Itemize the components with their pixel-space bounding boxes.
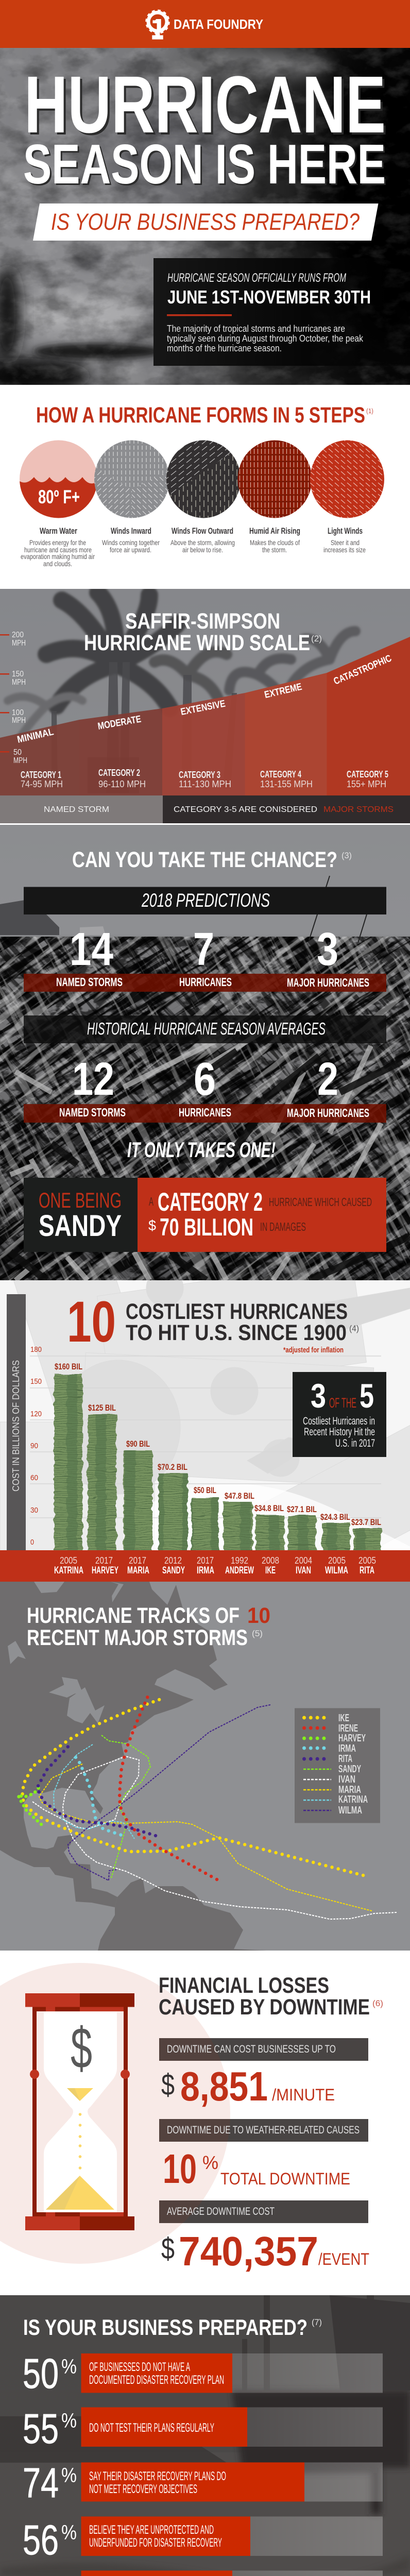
severity labels: CATASTROPHIC xyxy=(332,653,394,687)
stat: cost per minute xyxy=(161,2043,336,2109)
map water: Hudson Bay and lakes xyxy=(8,1582,178,1723)
historical numbers xyxy=(72,1054,338,1105)
track: Wilma xyxy=(68,1705,270,1880)
stat row: 50% no plan: 50 xyxy=(23,2350,59,2397)
speed axis xyxy=(0,631,27,765)
map land: South America xyxy=(98,1878,267,1951)
years and names strip: HARVEY xyxy=(92,1565,118,1576)
historical numbers: 12 xyxy=(72,1054,114,1105)
step: winds flow outward xyxy=(170,526,235,554)
years and names strip: ANDREW xyxy=(225,1565,254,1576)
stat row: 50% periodic backups xyxy=(23,2569,383,2576)
major storms bar: MAJOR STORMS xyxy=(323,805,394,814)
track: Irma xyxy=(76,1757,122,1835)
circle: winds inward xyxy=(94,440,169,518)
category 2: 96-110 MPH xyxy=(98,779,146,789)
step: light winds: Steer it and xyxy=(331,538,360,547)
speed axis: 100 xyxy=(12,708,24,717)
stat: weather-related downtime xyxy=(163,2124,360,2192)
heading: (2) xyxy=(311,634,322,643)
category 3: 111-130 MPH xyxy=(179,779,231,789)
predictions bar xyxy=(24,887,386,914)
step: humid air rising: the storm. xyxy=(262,546,287,554)
3 of the 5 callout: U.S. in 2017 xyxy=(335,1437,375,1449)
historical labels band xyxy=(24,1104,386,1123)
track: Harvey xyxy=(18,1788,41,1824)
years and names strip: RITA xyxy=(360,1565,374,1576)
predictions labels band: MAJOR HURRICANES xyxy=(287,976,369,989)
Sandy callout: SANDY xyxy=(39,1209,122,1243)
header band xyxy=(0,0,410,48)
step: humid air rising xyxy=(249,526,300,554)
predictions labels band: NAMED STORMS xyxy=(56,975,123,989)
category 2 xyxy=(98,768,146,789)
y-axis labels: 180 xyxy=(30,1345,42,1354)
speed axis: MPH xyxy=(12,678,26,687)
stat row: 50% no plan: DOCUMENTED DISASTER RECOVERY PLAN xyxy=(89,2373,224,2387)
historical labels band: HURRICANES xyxy=(179,1106,231,1119)
historical labels band: MAJOR HURRICANES xyxy=(287,1106,369,1120)
major storms bar xyxy=(163,795,410,823)
legend: HARVEY xyxy=(338,1733,366,1744)
step: light winds: increases its size xyxy=(323,546,366,554)
stat row: 74% objectives not met: SAY THEIR DISASTER RECOVERY PLANS DO xyxy=(89,2469,226,2483)
y-axis labels xyxy=(30,1345,42,1547)
step: humid air rising: Humid Air Rising xyxy=(249,526,300,536)
stat row: 56% unprotected: UNDERFUNDED FOR DISASTER RECOVERY xyxy=(89,2536,222,2550)
Sandy callout xyxy=(24,1178,386,1252)
predictions numbers xyxy=(70,924,338,975)
heading: 10 xyxy=(247,1603,270,1628)
season dates box xyxy=(153,258,410,366)
hourglass illustration xyxy=(25,1993,134,2230)
season dates box: typically seen during August through October, the peak xyxy=(167,333,364,344)
track: Maria xyxy=(39,1764,372,1911)
3 of the 5 callout: Recent History Hit the xyxy=(304,1426,375,1438)
heading xyxy=(67,1290,359,1354)
stat row: 50% no plan xyxy=(23,2350,383,2397)
step: warm water: Provides energy for the xyxy=(29,538,86,547)
Sandy callout: $ xyxy=(148,1217,156,1233)
years and names strip: IVAN xyxy=(296,1565,311,1576)
Sandy callout: A xyxy=(149,1195,153,1208)
years and names strip: 2017 xyxy=(129,1555,146,1566)
historical numbers: 6 xyxy=(194,1054,216,1105)
step: winds inward: Winds Inward xyxy=(111,526,151,536)
predictions labels band xyxy=(24,974,386,992)
3 of the 5 callout: 3 xyxy=(311,1377,326,1415)
predictions labels band: HURRICANES xyxy=(179,975,232,989)
heading: COSTLIEST HURRICANES xyxy=(126,1299,348,1324)
legend xyxy=(295,1708,380,1823)
legend: MARIA xyxy=(338,1784,361,1795)
years and names strip: 2008 xyxy=(262,1555,279,1566)
stat row: 50% no plan: OF BUSINESSES DO NOT HAVE A xyxy=(89,2360,190,2374)
heading: (6) xyxy=(372,1998,383,2008)
years and names strip: WILMA xyxy=(325,1565,348,1576)
stat row: 56% unprotected: 56 xyxy=(23,2517,59,2564)
heading xyxy=(27,1603,270,1650)
years and names strip: 2004 xyxy=(295,1555,312,1566)
stat: average downtime cost: 740,357 xyxy=(179,2228,318,2274)
inflation note: *adjusted for inflation xyxy=(283,1346,344,1354)
stat row: 56% unprotected xyxy=(23,2516,383,2564)
years and names strip: 1992 xyxy=(231,1555,248,1566)
speed axis: MPH xyxy=(13,756,27,765)
stat row: 74% objectives not met xyxy=(23,2460,383,2506)
step: winds flow outward: air below to rise. xyxy=(182,546,223,554)
speed axis: 150 xyxy=(12,670,24,679)
speed axis: MPH xyxy=(12,716,26,725)
value labels: $23.7 BIL xyxy=(351,1517,381,1527)
hourglass illustration: $ xyxy=(71,2016,92,2080)
value labels: $125 BIL xyxy=(88,1403,116,1413)
panel: Saffir-Simpson wind scale xyxy=(0,589,410,823)
heading: (5) xyxy=(252,1629,263,1638)
speed axis: 50 xyxy=(13,748,22,757)
heading: HURRICANE WIND SCALE xyxy=(84,631,310,655)
step: winds flow outward: Winds Flow Outward xyxy=(172,526,233,536)
hurricane tracks xyxy=(18,1694,397,1919)
y-axis labels: 120 xyxy=(30,1410,42,1418)
heading: FINANCIAL LOSSES xyxy=(159,1973,329,1998)
stat row: 55% do not test: DO NOT TEST THEIR PLANS REGULARLY xyxy=(89,2421,214,2435)
predictions numbers: 7 xyxy=(193,924,214,975)
legend: IVAN xyxy=(338,1774,355,1785)
track: Katrina xyxy=(54,1744,134,1839)
stat: cost per minute: $ xyxy=(161,2068,175,2102)
legend: KATRINA xyxy=(338,1794,368,1805)
circle: winds flow outward xyxy=(166,440,242,518)
circle: warm water xyxy=(20,440,97,520)
Sandy callout: CATEGORY 2 xyxy=(158,1188,263,1216)
heading: (4) xyxy=(349,1324,359,1333)
legend: RITA xyxy=(338,1753,352,1765)
Sandy callout: 70 BILLION xyxy=(160,1213,253,1241)
Sandy callout: IN DAMAGES xyxy=(260,1220,306,1233)
category 4 xyxy=(260,769,313,789)
legend: IRMA xyxy=(338,1743,356,1754)
heading: SAFFIR-SIMPSON xyxy=(125,609,280,634)
y-axis title bar xyxy=(7,1294,26,1550)
y-axis labels: 30 xyxy=(30,1506,38,1515)
track: Ike xyxy=(22,1698,363,1875)
predictions numbers: 14 xyxy=(70,924,113,975)
speed axis: 200 xyxy=(12,631,24,639)
legend: SANDY xyxy=(338,1764,361,1775)
category 5 xyxy=(347,769,388,789)
3 of the 5 callout: Costliest Hurricanes in xyxy=(303,1415,375,1427)
money stacks xyxy=(54,1374,381,1551)
value labels xyxy=(55,1362,381,1527)
track: Sandy xyxy=(101,1735,150,1878)
heading: (1) xyxy=(366,407,373,415)
heading xyxy=(159,1973,383,2020)
subtitle banner: IS YOUR BUSINESS PREPARED? xyxy=(51,209,360,235)
years and names strip: 2005 xyxy=(328,1555,346,1566)
circle: light winds xyxy=(310,440,384,518)
historical numbers: 2 xyxy=(317,1054,338,1105)
years and names strip: 2005 xyxy=(60,1555,77,1566)
heading: (7) xyxy=(312,2317,322,2327)
heading xyxy=(84,609,322,655)
severity labels: EXTREME xyxy=(263,682,303,701)
Sandy callout: ONE BEING xyxy=(39,1188,122,1212)
value labels: $50 BIL xyxy=(194,1485,216,1495)
y-axis title bar: COST IN BILLIONS OF DOLLARS xyxy=(11,1360,21,1492)
heading: 10 xyxy=(67,1290,116,1354)
step: light winds xyxy=(323,526,366,554)
stat row: 55% do not test: 55 xyxy=(23,2405,59,2452)
heading: (3) xyxy=(341,851,352,860)
panel: can you take the chance xyxy=(0,825,410,1280)
speed axis: MPH xyxy=(12,639,26,648)
category 4: 131-155 MPH xyxy=(260,779,313,789)
severity labels: MINIMAL xyxy=(16,726,55,745)
category 1: CATEGORY 1 xyxy=(21,770,61,780)
season dates box: The majority of tropical storms and hurricanes are xyxy=(167,324,345,334)
stat: cost per minute: DOWNTIME CAN COST BUSINESSES UP TO xyxy=(167,2043,336,2055)
season dates box: months of the hurricane season. xyxy=(167,343,282,353)
years and names strip: KATRINA xyxy=(54,1565,83,1576)
severity labels: EXTENSIVE xyxy=(180,699,226,718)
years and names strip: 2017 xyxy=(95,1555,113,1566)
heading: TO HIT U.S. SINCE 1900 xyxy=(126,1320,347,1345)
it only takes one: IT ONLY TAKES ONE! xyxy=(127,1138,276,1162)
category 1: 74-95 MPH xyxy=(21,779,63,789)
named storm bar: NAMED STORM xyxy=(44,805,109,814)
legend: WILMA xyxy=(338,1805,362,1816)
step: warm water: evaporation making humid air xyxy=(21,552,95,561)
panel: hero xyxy=(0,48,410,395)
stat: average downtime cost: AVERAGE DOWNTIME COST xyxy=(167,2206,275,2217)
step: winds inward: Winds coming together xyxy=(102,538,160,547)
stat row: 56% unprotected: BELIEVE THEY ARE UNPROTECTED AND xyxy=(89,2523,214,2537)
predictions bar: 2018 PREDICTIONS xyxy=(141,890,270,911)
years and names strip: IKE xyxy=(265,1565,276,1576)
value labels: $24.3 BIL xyxy=(320,1512,350,1522)
category 2: CATEGORY 2 xyxy=(98,768,140,778)
step: light winds: Light Winds xyxy=(328,526,363,536)
stat row: 74% objectives not met: % xyxy=(61,2464,77,2487)
category 3 xyxy=(179,770,231,789)
3 of the 5 callout xyxy=(293,1372,386,1457)
stat row: 56% unprotected: % xyxy=(61,2521,77,2544)
panel: hurricane tracks map xyxy=(0,1582,410,1951)
heading: IS YOUR BUSINESS PREPARED? xyxy=(23,2315,308,2340)
category 4: CATEGORY 4 xyxy=(260,769,301,779)
panel: is your business prepared xyxy=(0,2295,410,2576)
years and names strip: IRMA xyxy=(197,1565,214,1576)
stat: average downtime cost xyxy=(161,2206,369,2274)
step: warm water xyxy=(21,526,95,568)
3 of the 5 callout: OF THE xyxy=(329,1395,356,1411)
category 5: 155+ MPH xyxy=(347,779,386,789)
value labels: $160 BIL xyxy=(55,1362,82,1371)
years and names strip: SANDY xyxy=(162,1565,185,1576)
historical labels band: NAMED STORMS xyxy=(59,1106,126,1119)
historical averages bar xyxy=(24,1015,386,1043)
panel: financial losses xyxy=(0,1951,410,2295)
step: humid air rising: Makes the clouds of xyxy=(250,538,300,547)
3 of the 5 callout: 5 xyxy=(360,1377,374,1415)
step: winds inward xyxy=(102,526,160,554)
heading: CAN YOU TAKE THE CHANCE? xyxy=(72,848,337,872)
heading: HURRICANE TRACKS OF xyxy=(27,1603,240,1628)
stat row: 50% no plan: % xyxy=(61,2355,77,2378)
years and names strip xyxy=(0,1550,410,1582)
panel: how a hurricane forms xyxy=(20,403,384,568)
predictions numbers: 3 xyxy=(317,924,338,975)
value labels: $70.2 BIL xyxy=(158,1462,187,1472)
years and names strip: 2017 xyxy=(197,1555,214,1566)
y-axis labels: 60 xyxy=(30,1473,38,1482)
step: warm water: Warm Water xyxy=(40,526,77,536)
category 1 xyxy=(21,770,63,789)
category 5: CATEGORY 5 xyxy=(347,769,388,779)
major storms bar: CATEGORY 3-5 ARE CONISDERED xyxy=(174,805,317,814)
stat: weather-related downtime: 10 xyxy=(163,2146,197,2192)
stat: cost per minute: 8,851 xyxy=(180,2063,268,2109)
stat: weather-related downtime: TOTAL DOWNTIME xyxy=(220,2170,350,2188)
step: winds flow outward: Above the storm, allowing xyxy=(170,538,235,547)
value labels: $47.8 BIL xyxy=(225,1491,254,1501)
named storm bar xyxy=(0,795,163,823)
stat row: 55% do not test: % xyxy=(61,2410,77,2432)
track: Ivan xyxy=(32,1756,397,1919)
palm silhouettes xyxy=(8,592,355,737)
heading: RECENT MAJOR STORMS xyxy=(27,1625,248,1650)
stat: cost per minute: /MINUTE xyxy=(272,2086,335,2104)
map land: North America xyxy=(0,1582,228,1907)
legend: IRENE xyxy=(338,1723,358,1734)
stat row: 74% objectives not met: NOT MEET RECOVERY OBJECTIVES xyxy=(89,2482,197,2496)
logo: Data Foundry gear xyxy=(146,10,169,40)
circle: humid air rising xyxy=(238,440,312,518)
panel: costliest hurricanes xyxy=(0,1280,410,1582)
category 3: CATEGORY 3 xyxy=(179,770,220,780)
bar chart: costliest hurricanes xyxy=(30,1345,381,1551)
logo wordmark: DATA FOUNDRY xyxy=(174,16,263,32)
title xyxy=(23,60,388,197)
value labels: $90 BIL xyxy=(126,1439,150,1449)
y-axis labels: 0 xyxy=(30,1538,34,1547)
subtitle banner xyxy=(33,204,378,241)
stat: average downtime cost: $ xyxy=(161,2232,175,2265)
y-axis labels: 90 xyxy=(30,1442,38,1450)
stat: weather-related downtime: % xyxy=(202,2152,218,2173)
step: winds inward: force air upward. xyxy=(110,546,151,554)
stat: average downtime cost: /EVENT xyxy=(318,2250,369,2268)
step: warm water: hurricane and causes more xyxy=(24,546,92,554)
severity labels: MODERATE xyxy=(97,714,142,732)
years and names strip: 2005 xyxy=(358,1555,376,1566)
severity labels xyxy=(16,653,394,745)
step: warm water: and clouds. xyxy=(43,560,72,568)
circle: warm water: 80º F+ xyxy=(38,486,80,507)
value labels: $27.1 BIL xyxy=(287,1504,317,1514)
stat row: 55% do not test xyxy=(23,2405,383,2452)
legend: IKE xyxy=(338,1713,349,1724)
years and names strip: 2012 xyxy=(164,1555,182,1566)
years and names strip: MARIA xyxy=(127,1565,149,1576)
track: Irene xyxy=(119,1694,217,1879)
value labels: $34.8 BIL xyxy=(254,1503,284,1513)
wind scale ramp xyxy=(0,637,410,795)
track: Rita xyxy=(38,1745,156,1836)
y-axis labels: 150 xyxy=(30,1377,42,1386)
stat row: 74% objectives not met: 74 xyxy=(23,2460,59,2506)
